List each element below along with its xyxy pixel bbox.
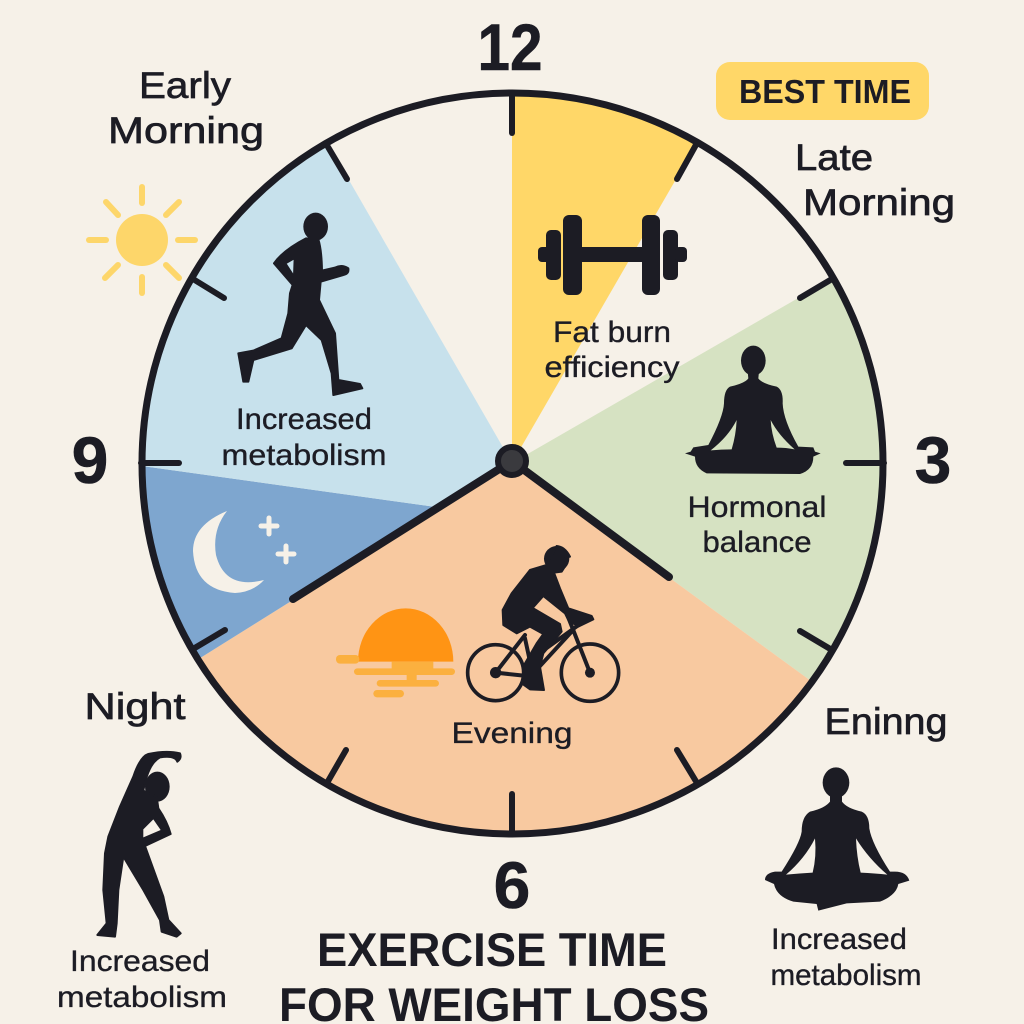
segment: early morning light blue — [142, 142, 512, 507]
icon: stretching figure — [97, 752, 181, 937]
icon: moon and stars — [193, 511, 294, 593]
label: Eninng: Eninng — [824, 701, 948, 742]
icon: meditating figure on green — [685, 346, 821, 474]
icon: meditating figure — [765, 767, 909, 911]
number 6: 6 — [494, 848, 530, 922]
centre hub — [498, 447, 526, 475]
icon: sun — [89, 187, 195, 293]
clock hand: right — [512, 461, 669, 577]
text: increased metabolism (night): metabolism — [57, 981, 227, 1014]
text: fat burn efficiency: Fat burn — [553, 316, 671, 349]
label: Night: Night — [84, 686, 186, 727]
text: hormonal balance: balance — [702, 526, 812, 559]
segment: best time yellow — [512, 93, 698, 463]
clock rim — [142, 93, 883, 834]
segment: night dark blue — [142, 463, 512, 660]
clock hand: left — [293, 461, 512, 599]
number 9: 9 — [72, 423, 108, 497]
number 3: 3 — [915, 423, 951, 497]
label: Early Morning: Early — [139, 65, 232, 106]
text: increased metabolism (evening): Increased — [771, 923, 907, 956]
title: EXERCISE TIME — [317, 923, 667, 976]
segment: hormonal balance green — [512, 278, 882, 681]
text: increased metabolism (night): Increased — [70, 945, 210, 978]
icon: runner — [238, 213, 362, 395]
icon: sunset — [336, 608, 455, 697]
label: Early Morning: Morning — [108, 110, 264, 151]
text: hormonal balance: Hormonal — [688, 491, 826, 524]
icon: dumbbell — [538, 215, 687, 295]
best time badge: BEST TIME — [739, 73, 911, 110]
text: evening in segment: Evening — [452, 717, 572, 750]
hour ticks — [141, 95, 884, 832]
text: fat burn efficiency: efficiency — [544, 351, 680, 384]
text: increased metabolism (evening): metabolism — [770, 959, 922, 992]
best time badge — [716, 62, 929, 120]
segment: evening orange — [197, 463, 811, 834]
icon: cyclist — [468, 546, 619, 701]
clock face — [141, 93, 884, 834]
number 12: 12 — [478, 10, 542, 84]
clock dial background — [142, 93, 883, 834]
label: Late Morning: Morning — [803, 182, 955, 223]
text: increased metabolism (morning): Increased — [236, 403, 372, 436]
text: increased metabolism (morning): metabolism — [222, 439, 386, 472]
label: Late Morning: Late — [795, 137, 873, 178]
